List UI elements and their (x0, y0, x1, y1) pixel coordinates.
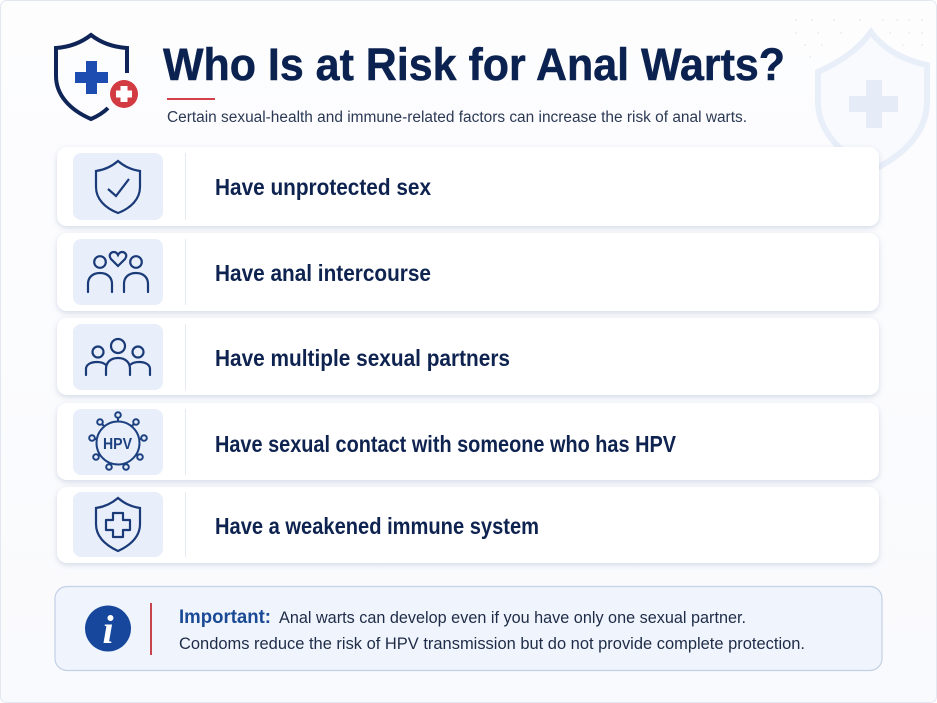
icon tile: group of three people (73, 324, 163, 390)
label: Have multiple sexual partners (215, 345, 510, 371)
callout text (179, 606, 805, 653)
title: Who Is at Risk for Anal Warts? (163, 39, 785, 90)
panel: risk factor 3 (57, 318, 879, 395)
icon: info circle (85, 606, 131, 652)
panel: risk factor 5 (57, 487, 879, 563)
callout text: Anal warts can develop even if you have only one sexual partner. (279, 608, 746, 627)
icon tile: couple with heart (73, 239, 163, 305)
callout text: Condoms reduce the risk of HPV transmission but do not provide complete protection. (179, 634, 805, 653)
panel: risk factor 1 (57, 147, 879, 226)
panel: risk factor 2 (57, 233, 879, 311)
callout text: Important: (179, 606, 271, 628)
panel: risk factor 4 (57, 403, 879, 480)
icon tile: HPV virus (73, 409, 163, 475)
icon tile: shield with check (73, 153, 163, 220)
callout: important note (55, 586, 882, 670)
icon: header shield with medical cross (56, 35, 138, 119)
label: Have unprotected sex (215, 174, 431, 200)
subtitle: Certain sexual-health and immune-related factors can increase the risk of anal warts. (167, 109, 747, 126)
icon tile: HPV virus: HPV (103, 436, 132, 453)
label: Have a weakened immune system (215, 513, 539, 539)
icon tile: shield with cross (73, 492, 163, 557)
watermark: shield with cross (795, 19, 927, 170)
label: Have sexual contact with someone who has HPV (215, 431, 677, 457)
red accent rule (167, 98, 215, 100)
label: Have anal intercourse (215, 260, 431, 286)
icon: info circle: i (102, 607, 114, 652)
